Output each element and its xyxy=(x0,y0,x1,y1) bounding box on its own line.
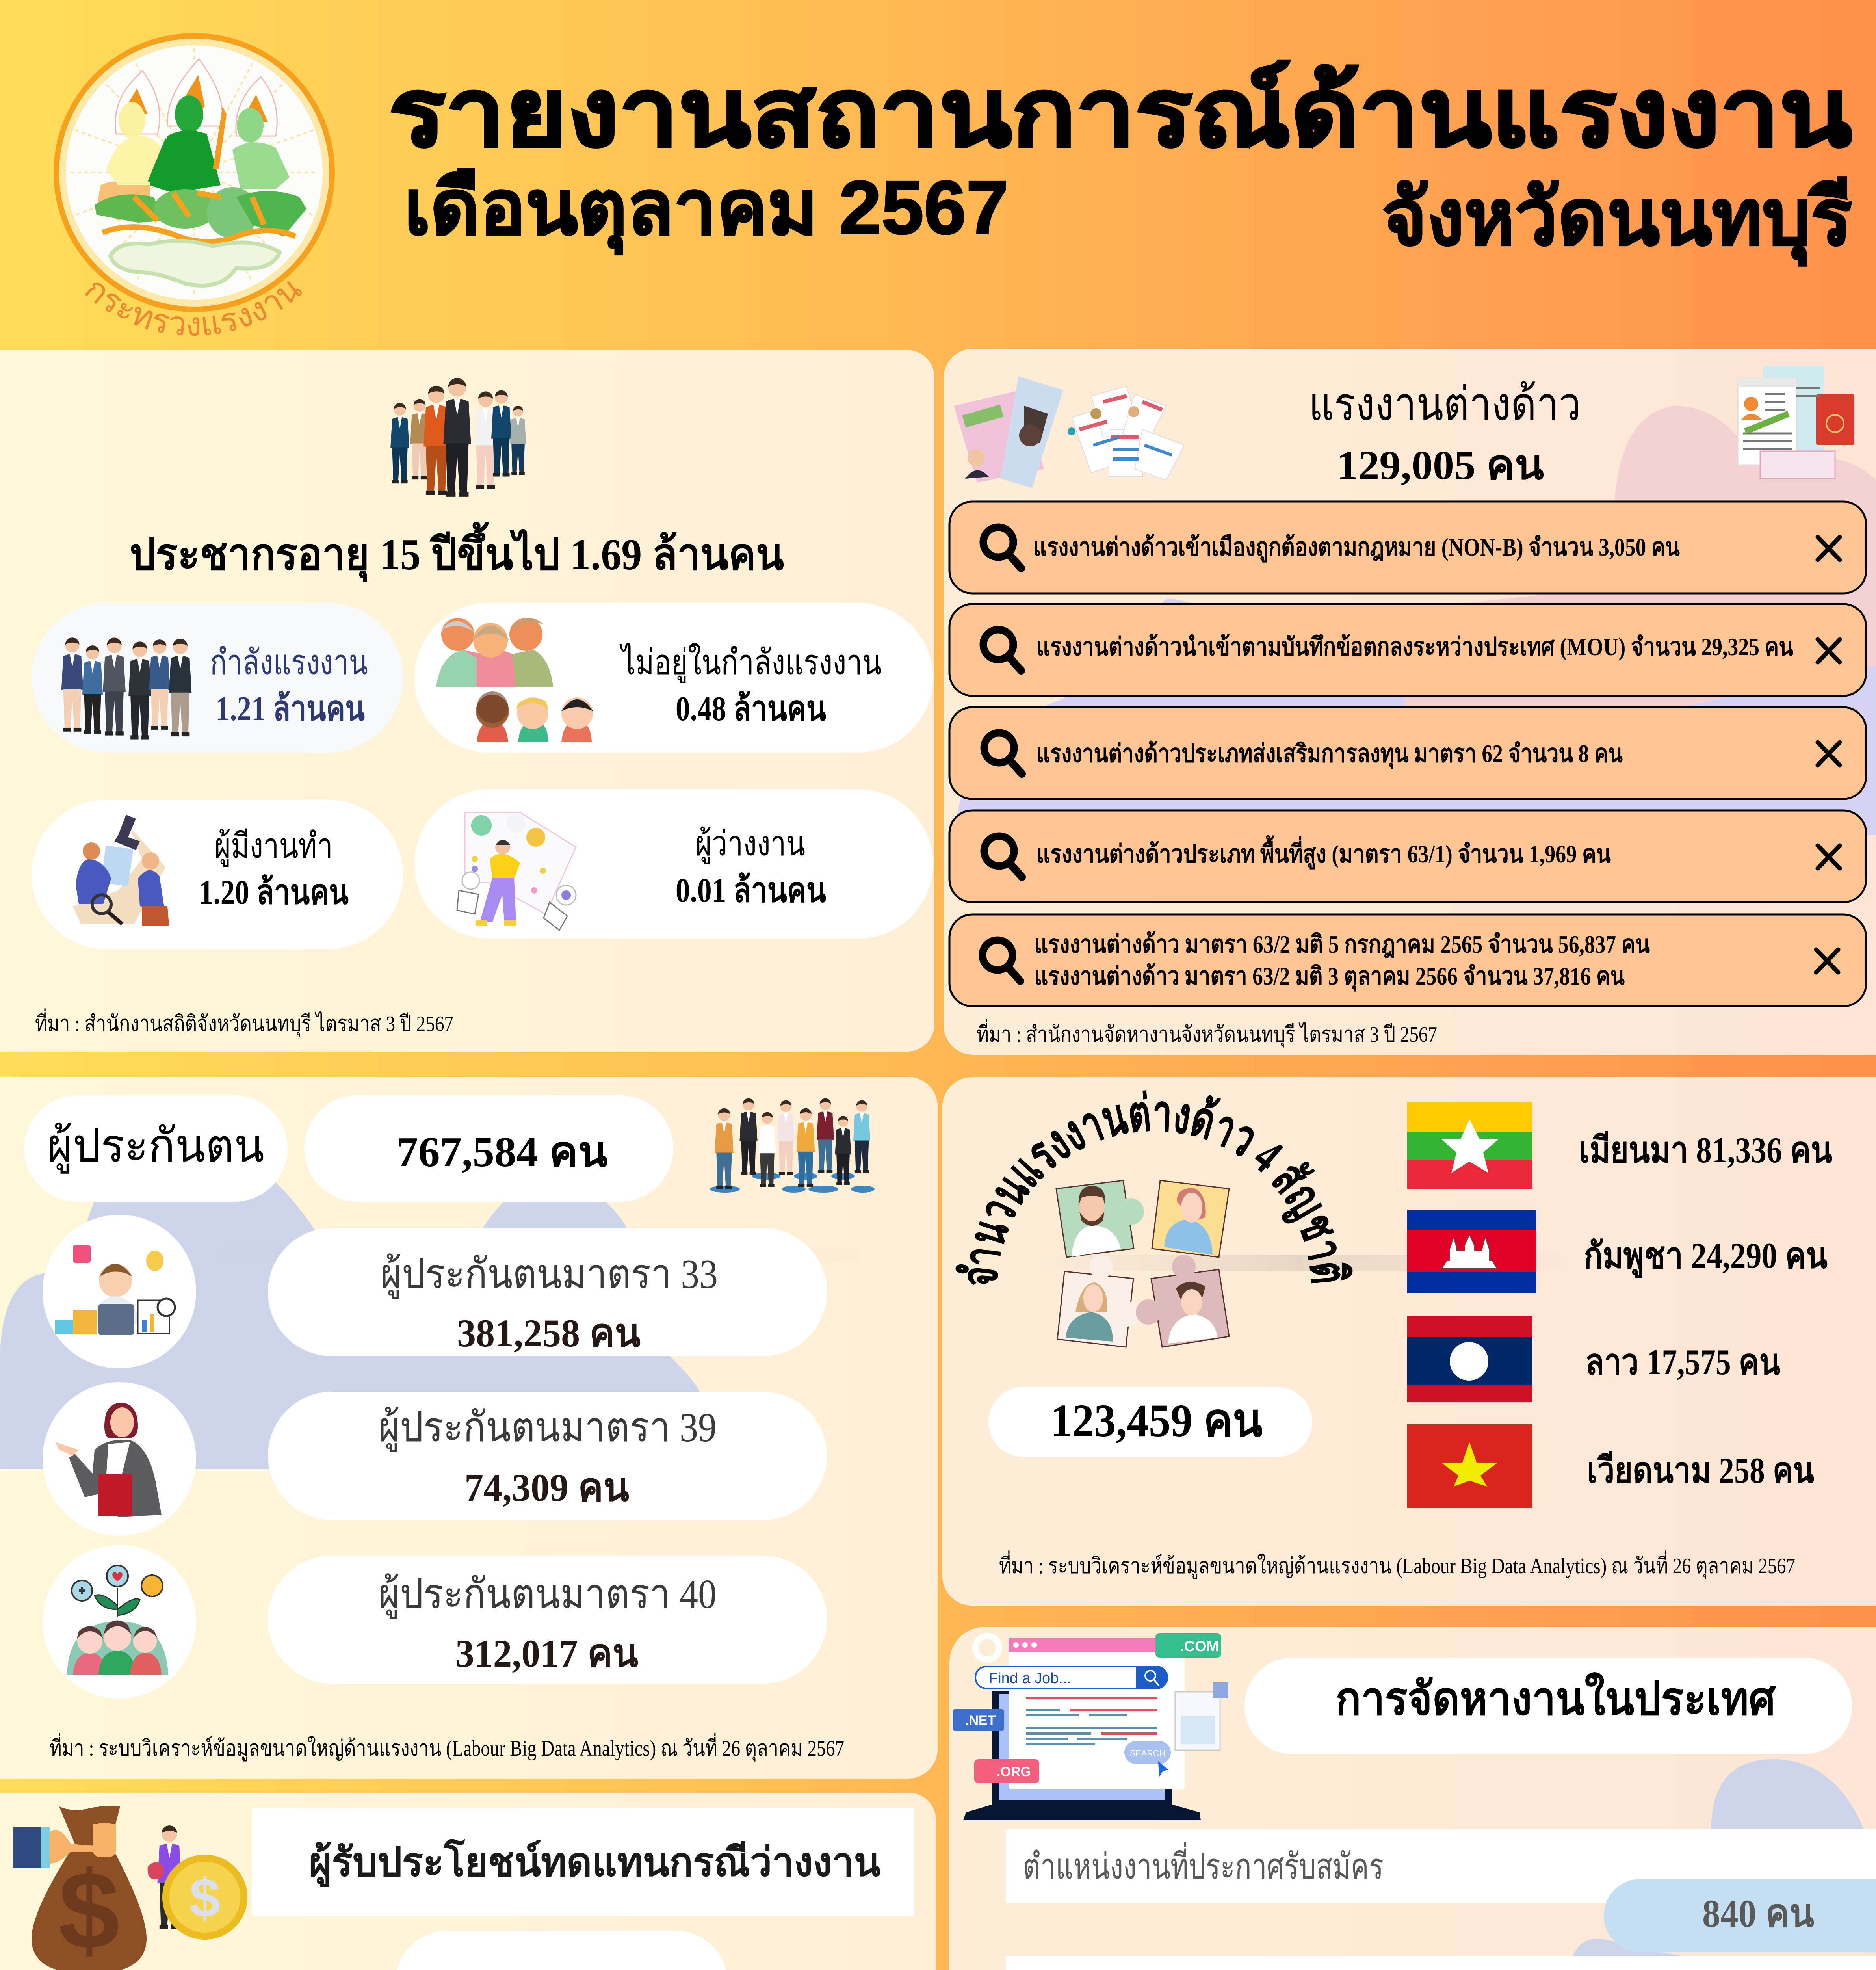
icon: close xyxy=(1818,742,1840,765)
total pill xyxy=(988,1387,1312,1457)
label pill: ผู้ประกันตน xyxy=(47,1120,264,1174)
decorative blobs xyxy=(1572,1759,1865,1958)
value pill xyxy=(268,1556,827,1684)
icon: close xyxy=(1818,639,1840,662)
icon circle: office worker xyxy=(43,1215,196,1368)
total: 129,005 คน xyxy=(1337,442,1544,488)
subtitle: month: เดือนตุลาคม 2567 xyxy=(404,165,1009,255)
icon: business group xyxy=(390,378,526,497)
source note: ที่มา : สำนักงานจัดหางานจังหวัดนนทบุรี ไตรมาส 3 ปี 2567 xyxy=(977,1019,1437,1048)
icon: job search laptop: .NET xyxy=(965,1713,996,1728)
decorative blob xyxy=(0,1162,700,1469)
panel: migrant workers xyxy=(944,349,1876,1055)
heading: แรงงานต่างด้าว xyxy=(1309,379,1581,430)
row: section 39: ผู้ประกันตนมาตรา 39 xyxy=(378,1404,717,1452)
row 2: MOU xyxy=(949,604,1866,696)
row 4: highland: แรงงานต่างด้าวประเภท พื้นที่สูง (มาตรา 63/1) จำนวน 1,969 คน xyxy=(1036,835,1611,870)
flag: Vietnam xyxy=(1407,1424,1532,1508)
row: section 40 xyxy=(43,1545,827,1699)
row 1: NON-B xyxy=(949,502,1866,593)
card: unemployed xyxy=(414,789,933,939)
value: 0.48 ล้านคน xyxy=(676,690,826,728)
row: applicants xyxy=(1006,1956,1876,1970)
decorative blobs xyxy=(957,406,1876,835)
row 1: NON-B: แรงงานต่างด้าวเข้าเมืองถูกต้องตามกฎหมาย (NON-B) จำนวน 3,050 คน xyxy=(1033,533,1680,563)
logo: Ministry of Labour seal: กระทรวงแรงงาน xyxy=(78,269,308,343)
value: 0.01 ล้านคน xyxy=(676,872,826,910)
row 3: section 62: แรงงานต่างด้าวประเภทส่งเสริมการลงทุน มาตรา 62 จำนวน 8 คน xyxy=(1036,740,1623,769)
total pill: 767,584 คน xyxy=(396,1129,608,1176)
icon: search xyxy=(983,527,1021,568)
row: section 40: 312,017 คน xyxy=(455,1632,638,1675)
icon: visa documents xyxy=(1738,366,1854,479)
panel: insured persons xyxy=(0,1077,938,1779)
row: section 33: ผู้ประกันตนมาตรา 33 xyxy=(380,1251,718,1299)
label: ผู้ว่างงาน xyxy=(695,825,805,864)
row: section 33: 381,258 คน xyxy=(457,1311,641,1355)
icon: job search laptop xyxy=(953,1633,1228,1820)
panel: population xyxy=(0,350,934,1052)
icon: workers xyxy=(61,637,191,740)
icon: passport and stamp xyxy=(954,376,1063,488)
total pill xyxy=(395,1931,728,1970)
label pill xyxy=(24,1095,288,1202)
row 5: section 63/2: แรงงานต่างด้าว มาตรา 63/2 มติ 3 ตุลาคม 2566 จำนวน 37,816 คน xyxy=(1035,962,1625,992)
row: section 39 xyxy=(43,1382,827,1536)
arched heading: จำนวนแรงงานต่างด้าว 4 สัญชาติ xyxy=(951,1085,1357,1290)
logo: Ministry of Labour seal xyxy=(54,33,335,343)
panel: domestic job placement xyxy=(949,1627,1876,1970)
title bar: ผู้รับประโยชน์ทดแทนกรณีว่างงาน xyxy=(309,1839,880,1887)
icon: close xyxy=(1818,537,1840,560)
row 3: section 62 xyxy=(949,707,1866,799)
label: Vietnam: เวียดนาม 258 คน xyxy=(1587,1450,1814,1491)
label: กำลังแรงงาน xyxy=(210,644,368,682)
icon: occupations xyxy=(710,1098,875,1193)
heading: ประชากรอายุ 15 ปีขึ้นไป 1.69 ล้านคน xyxy=(130,522,784,582)
row: section 39: 74,309 คน xyxy=(464,1466,629,1509)
icon circle: family care xyxy=(43,1545,196,1699)
row: section 40: ผู้ประกันตนมาตรา 40 xyxy=(378,1571,717,1619)
icon: man and coin xyxy=(148,1825,247,1940)
flag: Cambodia xyxy=(1407,1210,1536,1293)
icon: search xyxy=(983,940,1020,981)
total pill xyxy=(304,1095,673,1202)
card: employed xyxy=(32,800,403,949)
label: ผู้มีงานทำ xyxy=(214,827,333,867)
value: 1.20 ล้านคน xyxy=(199,873,349,912)
icon: resume sheets xyxy=(1068,386,1184,480)
label: Laos: ลาว 17,575 คน xyxy=(1585,1342,1780,1382)
label: Myanmar: เมียนมา 81,336 คน xyxy=(1579,1130,1832,1170)
icon: money bag with hands: $ xyxy=(58,1849,120,1970)
icon: search xyxy=(984,836,1022,877)
value pill xyxy=(268,1392,827,1520)
row 5: section 63/2 xyxy=(949,914,1866,1006)
icon: puzzle portraits xyxy=(1056,1180,1229,1347)
icon: close xyxy=(1816,950,1838,972)
icon circle: businesswoman xyxy=(43,1382,196,1536)
icon: money bag with hands xyxy=(13,1806,196,1970)
icon: elderly xyxy=(436,618,553,687)
row 5: section 63/2: แรงงานต่างด้าว มาตรา 63/2 มติ 5 กรกฎาคม 2565 จำนวน 56,837 คน xyxy=(1035,930,1650,958)
icon: job search laptop: .ORG xyxy=(997,1764,1031,1779)
icon: search xyxy=(983,630,1021,671)
flag: Laos xyxy=(1407,1316,1532,1402)
row: vacancies xyxy=(1006,1829,1876,1952)
row: section 33 xyxy=(43,1215,827,1368)
source note: ที่มา : สำนักงานสถิติจังหวัดนนทบุรี ไตรมาส 3 ปี 2567 xyxy=(35,1008,453,1037)
title bar xyxy=(252,1808,914,1916)
icon: close xyxy=(1818,846,1840,868)
icon: job search laptop: Find a Job... xyxy=(989,1670,1071,1687)
title pill xyxy=(1244,1658,1852,1754)
source note: ที่มา : ระบบวิเคราะห์ข้อมูลขนาดใหญ่ด้านแรงงาน (Labour Big Data Analytics) ณ วันที่ 26 ตุลาคม 2567 xyxy=(50,1733,844,1762)
panel: nationalities xyxy=(942,1077,1876,1606)
header xyxy=(54,33,1852,343)
panel: unemployment benefits xyxy=(0,1793,936,1970)
icon: employed people xyxy=(73,815,169,926)
value: 1.21 ล้านคน xyxy=(215,690,365,728)
label: Cambodia: กัมพูชา 24,290 คน xyxy=(1584,1236,1828,1278)
icon: job search laptop: SEARCH xyxy=(1130,1748,1165,1759)
row: vacancies: ตำแหน่งงานที่ประกาศรับสมัคร xyxy=(1023,1842,1384,1886)
icon: job search laptop: .COM xyxy=(1180,1638,1219,1655)
title: รายงานสถานการณ์ด้านแรงงาน xyxy=(389,60,1852,165)
card: labour force xyxy=(32,603,403,753)
subtitle: province: จังหวัดนนทบุรี xyxy=(1382,174,1852,266)
row: vacancies: 840 คน xyxy=(1702,1892,1814,1935)
flag: Myanmar xyxy=(1407,1102,1532,1189)
value pill xyxy=(268,1228,827,1356)
row 4: highland xyxy=(949,810,1866,902)
icon: search xyxy=(984,733,1022,774)
icon: man and coin: $ xyxy=(189,1867,220,1929)
icon: children xyxy=(476,691,593,742)
label: ไม่อยู่ในกำลังแรงงาน xyxy=(619,643,882,683)
icon: job seeker xyxy=(457,812,576,930)
title pill: การจัดหางานในประเทศ xyxy=(1335,1672,1776,1725)
card: outside labour force xyxy=(414,603,933,753)
total pill: 123,459 คน xyxy=(1050,1395,1263,1446)
